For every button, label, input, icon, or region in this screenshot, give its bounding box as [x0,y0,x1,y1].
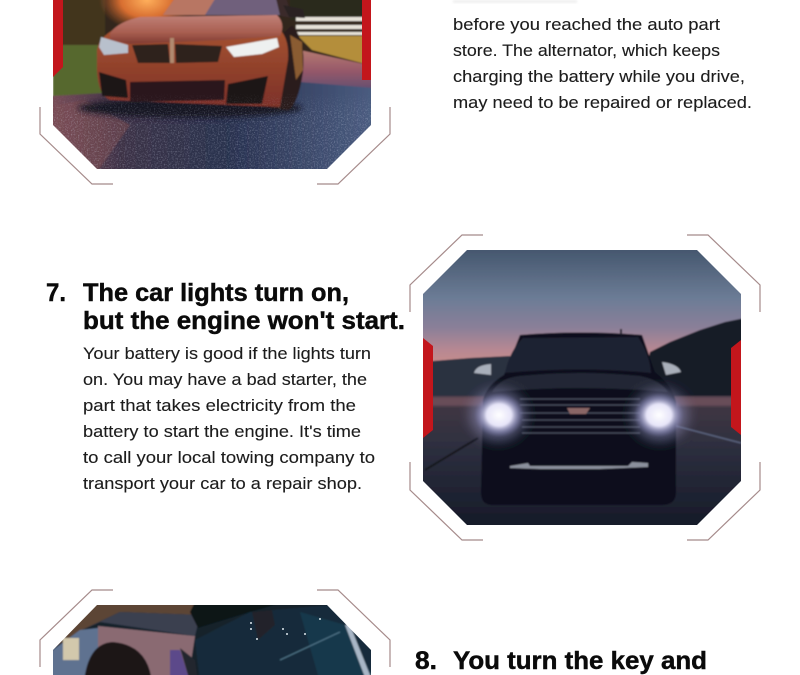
text block: item 7 explanation: to call your local towing company to [83,448,375,467]
sunset glow [100,0,184,24]
grass left [53,44,102,97]
dark roof section [190,602,285,628]
heading: item 8: You turn the key and [453,647,707,675]
headlight right [226,38,279,57]
background trees [104,0,362,65]
horizon glow [420,397,745,406]
headlights [474,393,524,437]
text block: item 7 explanation: Your battery is good if the lights turn [83,344,371,363]
heading: item 7: but the engine won't start. [83,307,405,335]
fence [296,17,364,35]
heading: item 7: 7. [46,279,66,307]
windshield [505,337,651,373]
roof pillar [278,0,289,17]
photo panel: red sports car on gravel road [51,0,375,172]
antenna [620,329,622,335]
rearview mirror [252,610,275,640]
hood [110,15,282,44]
shadow under car [78,98,302,118]
sky [420,247,745,362]
text block: alternator explanation: store. The alternator, which keeps [453,41,720,60]
bracket frame: SUV photo [410,235,760,540]
grass right [298,35,362,64]
windshield [163,0,280,15]
heading: item 8: 8. [415,647,437,675]
car body [97,24,288,107]
text block: alternator explanation [453,15,752,112]
bracket frame: driver photo [40,590,390,667]
heading: item 7: The car lights turn on, [83,279,349,307]
text block: item 7 explanation: transport your car to a repair shop. [83,474,362,493]
wheel and flank [270,25,304,110]
hood [492,373,668,392]
text block: alternator explanation: before you reached the auto part [453,15,720,34]
dark trees right [290,0,375,20]
lower bumper [130,80,225,102]
truck body [481,332,676,505]
road and gravel [300,50,371,88]
ceiling band [96,612,198,636]
mirror [283,5,305,18]
text block: alternator explanation: may need to be repaired or replaced. [453,93,752,112]
headlight left [99,37,128,55]
window left [50,628,98,675]
bracket frame: car photo [40,107,390,184]
door pillar [170,650,190,675]
reflection streak [345,625,372,675]
road marking [672,425,741,443]
treeline right [648,318,741,398]
kidney grille [132,44,170,63]
back wall [98,626,195,675]
headlight haze [470,389,526,441]
heading: item 7 [46,279,405,335]
red side tabs [53,0,63,77]
gravel texture [53,92,371,170]
text block: item 7 explanation: part that takes electricity from the [83,396,356,415]
bowtie badge [567,408,590,414]
grille [520,399,640,433]
ceiling [56,605,195,647]
text block: item 7 explanation: on. You may have a bad starter, the [83,370,367,389]
windshield [195,605,375,675]
mirrors [474,364,491,375]
text block: item 7 explanation [83,344,375,493]
left hill [433,355,512,397]
lower trim [510,462,648,469]
road [420,396,745,528]
photo panel: driver inside car [50,602,375,675]
hair [84,642,152,675]
red side tabs [423,338,433,438]
text block: item 7 explanation: battery to start the engine. It's time [83,422,361,441]
photo panel: dark SUV with headlights on [420,247,745,528]
faded cropped text line [453,0,577,3]
text block: alternator explanation: charging the battery while you drive, [453,67,745,86]
